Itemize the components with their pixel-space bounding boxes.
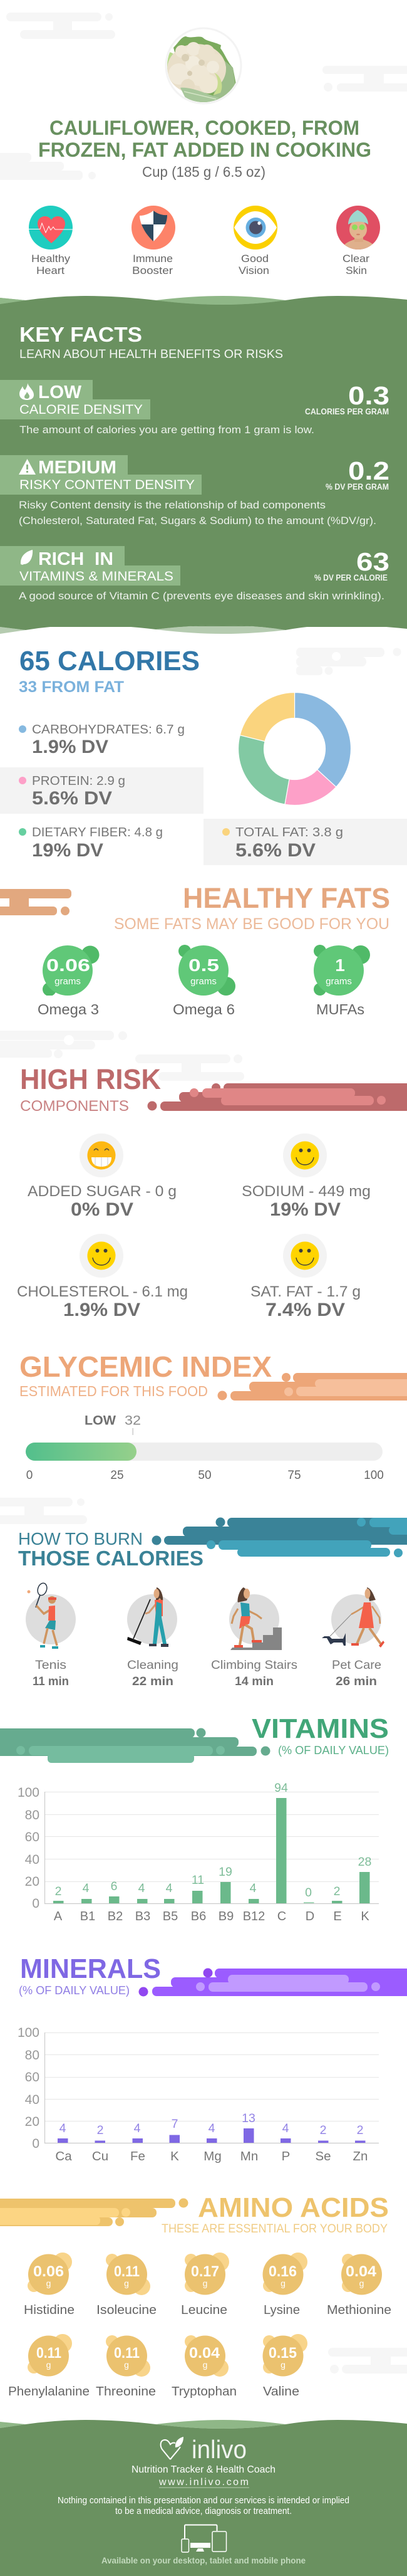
bar chart: vitamins: 4 [138,1881,145,1895]
risk: added sugar: 0% DV [71,1199,133,1220]
tagline and website: www.inlivo.com [158,2477,249,2488]
bar chart: vitamins: 20 [25,1874,39,1889]
tagline and website: Nutrition Tracker & Health Coach [131,2464,276,2475]
glycemic index gauge [26,1413,384,1482]
wave: bottom of key facts [0,625,407,634]
amino acid: tryptophan: g [203,2360,207,2370]
risk: added sugar [28,1133,177,1220]
vitamins heading [252,1713,389,1757]
amino acid: isoleucine [96,2254,157,2317]
background clouds: high risk [0,1031,244,1081]
bar chart: vitamins: 28 [358,1855,371,1869]
benefit: immune booster: Immune [133,253,173,265]
disclaimer [58,2496,349,2516]
activity: tennis: Tenis [35,1658,66,1672]
bar chart: vitamins: 2 [55,1885,61,1898]
amino acid: phenylalanine [8,2334,90,2399]
bar chart: minerals: Ca [55,2149,72,2163]
title: CAULIFLOWER, COOKED, FROM [49,117,359,139]
fact: low calorie density [0,380,389,436]
background cloud: calories [296,648,401,675]
decoration: burn swoosh [152,1517,407,1557]
bar chart: vitamins: 4 [83,1881,90,1895]
minerals heading [19,1953,161,1997]
how to burn heading [18,1529,204,1570]
fat: omega 6: Omega 6 [173,1001,235,1017]
bar chart: vitamins: K [361,1910,369,1923]
serving size: Cup (185 g / 6.5 oz) [142,164,265,180]
logo: inlivo [161,2435,247,2464]
benefit: immune booster [131,206,175,276]
calories heading [19,646,200,696]
bar chart: vitamins: C [277,1910,286,1923]
bar chart: vitamins: 0 [32,1896,39,1911]
calories heading: 33 FROM FAT [19,678,124,696]
risk: added sugar: ADDED SUGAR - 0 g [28,1183,177,1200]
amino acids heading [162,2192,389,2236]
bar chart: minerals: 2 [320,2123,326,2137]
how to burn heading: HOW TO BURN [18,1529,143,1548]
amino acid: threonine: 0.11 [114,2345,140,2362]
vitamins heading: VITAMINS [252,1713,389,1744]
amino acid: methionine: Methionine [327,2303,391,2317]
bar chart: vitamins: E [333,1910,342,1923]
legend: protein: 5.6% DV [32,788,112,809]
amino acid: lysine: g [281,2278,286,2288]
amino acid: histidine: 0.06 [33,2263,64,2280]
fact: low calorie density: 0.3 [348,381,389,410]
glycemic index gauge: 32 [125,1413,141,1428]
bar chart: minerals: K [170,2149,179,2163]
amino acid: phenylalanine: 0.11 [36,2345,61,2362]
legend: protein: PROTEIN: 2.9 g [32,774,125,788]
activity: pet care: 26 min [336,1674,377,1688]
glycemic index gauge: 50 [198,1469,212,1482]
bar chart: vitamins: B9 [219,1910,234,1923]
legend: total fat: 5.6% DV [235,840,316,861]
fact: medium risky content density: (Cholesterol, Saturated Fat, Sugars & Sodium) to the amount (%DV/gr). [19,515,376,527]
amino acid: histidine: g [46,2278,51,2288]
decoration: high risk swoosh [148,1083,407,1111]
benefit: healthy heart: Healthy [31,253,71,265]
fact: rich in vitamins and minerals [0,546,389,602]
bar chart: vitamins: 19 [219,1865,232,1879]
fact: low calorie density: CALORIE DENSITY [19,402,143,417]
bar chart: vitamins: B12 [243,1910,265,1923]
bar chart: minerals: 7 [172,2117,178,2131]
bar chart: minerals: 4 [209,2121,215,2135]
amino acid: isoleucine: g [124,2278,129,2288]
bar chart: vitamins: 4 [250,1881,257,1895]
benefit: immune booster: Booster [132,265,173,276]
background cloud: top left [6,13,115,39]
calories heading: 65 CALORIES [19,646,200,676]
bar chart: minerals: 20 [25,2115,39,2129]
fact: rich in vitamins and minerals: VITAMINS & MINERALS [19,569,173,584]
activity: climbing stairs [211,1587,297,1688]
amino acid: leucine: g [203,2278,207,2288]
legend: carbohydrates: 1.9% DV [32,737,108,757]
bar chart: vitamins: 4 [166,1881,173,1895]
risk: sodium: SODIUM - 449 mg [242,1183,371,1200]
vitamins heading: (% OF DAILY VALUE) [278,1743,389,1757]
amino acid: leucine: 0.17 [191,2263,219,2280]
disclaimer: to be a medical advice, diagnosis or treatment. [115,2506,292,2516]
bar chart: minerals: 4 [282,2121,289,2135]
amino acid: leucine [181,2253,229,2317]
risk: saturated fat: SAT. FAT - 1.7 g [250,1283,361,1300]
bar chart: vitamins: D [306,1910,314,1923]
amino acid: histidine [24,2253,75,2317]
disclaimer: Nothing contained in this presentation and our services is intended or implied [58,2496,349,2506]
amino acid: lysine: 0.16 [269,2263,297,2280]
decoration: minerals swoosh [139,1969,407,1996]
decoration: glycemic swoosh [218,1373,407,1401]
fact: low calorie density: The amount of calories you are getting from 1 gram is low. [19,424,314,436]
amino acid: valine: Valine [263,2385,299,2399]
activity: cleaning: 22 min [132,1674,173,1688]
amino acid: methionine: 0.04 [346,2263,377,2280]
bar chart: vitamins: 40 [25,1853,39,1867]
activity: climbing stairs: 14 min [235,1674,274,1688]
amino acid: leucine: Leucine [181,2303,227,2317]
panel: footer [0,2420,407,2576]
glycemic index gauge: 100 [364,1469,384,1482]
bar chart: minerals: 4 [59,2121,66,2135]
fact: low calorie density: CALORIES PER GRAM [305,407,389,416]
background cloud: burn [0,1498,87,1524]
bar chart: vitamins: B5 [163,1910,178,1923]
fact: medium risky content density: % DV PER GRAM [326,482,389,492]
bar chart: minerals: 13 [242,2111,255,2125]
bar chart: vitamins: 80 [25,1808,39,1822]
food image: cauliflower [166,28,241,107]
activity: pet care: Pet Care [332,1658,381,1672]
amino acids heading: THESE ARE ESSENTIAL FOR YOUR BODY [162,2222,388,2236]
benefit: clear skin: Clear [343,253,369,265]
benefit: good vision: Good [241,253,269,265]
benefit: healthy heart [29,206,73,276]
legend: dietary fiber: DIETARY FIBER: 4.8 g [32,825,163,839]
fat: mufas [314,945,370,1017]
amino acid: isoleucine: Isoleucine [96,2303,157,2317]
legend: total fat: TOTAL FAT: 3.8 g [235,825,343,839]
fat: mufas: 1 [335,955,345,975]
benefit: healthy heart: Heart [36,265,64,276]
activity: cleaning [127,1587,178,1688]
bar chart: vitamins: 0 [305,1886,312,1900]
bar chart: minerals: 4 [134,2121,141,2135]
donut chart: macronutrients [239,692,351,805]
fact: medium risky content density: 0.2 [348,456,389,485]
bar chart: vitamins: 60 [25,1830,39,1844]
amino acid: tryptophan: Tryptophan [172,2385,237,2399]
glycemic index gauge: 0 [26,1469,33,1482]
fat: omega 3: 0.06 [46,955,90,975]
amino acid: methionine: g [359,2278,364,2288]
key facts heading [19,323,283,361]
fat: omega 3 [38,945,99,1017]
fat: mufas: grams [326,976,352,987]
amino acids heading: AMINO ACIDS [198,2192,389,2223]
healthy fats heading: SOME FATS MAY BE GOOD FOR YOU [114,915,389,933]
title: FROZEN, FAT ADDED IN COOKING [38,139,371,161]
risk: sodium: 19% DV [270,1199,341,1220]
amino acid: isoleucine: 0.11 [114,2263,140,2280]
bar chart: minerals: 100 [18,2026,39,2040]
bar chart: vitamins: 11 [192,1873,204,1887]
healthy fats heading: HEALTHY FATS [183,882,390,914]
bar chart: minerals: Mg [204,2149,222,2163]
healthy fats heading [114,882,390,933]
amino acid: valine: 0.15 [269,2345,297,2362]
decoration: amino acids swoosh [0,2198,188,2226]
background cloud: amino acids [328,2348,407,2374]
fact: rich in vitamins and minerals: A good source of Vitamin C (prevents eye diseases and skin wrinkling). [19,590,384,602]
bar chart: minerals: 40 [25,2093,39,2107]
benefit: clear skin: Skin [346,265,367,276]
fat: mufas: MUFAs [316,1001,364,1017]
panel: key facts [0,296,407,627]
risk: cholesterol: 1.9% DV [63,1300,140,1320]
risk: sodium [242,1133,371,1220]
fat: omega 6 [173,945,235,1017]
legend: dietary fiber [19,825,163,861]
amino acid: methionine [327,2254,391,2317]
bar chart: minerals: 2 [97,2123,103,2137]
activity: cleaning: Cleaning [127,1658,178,1672]
glycemic index heading [19,1350,272,1399]
activity: climbing stairs: Climbing Stairs [211,1658,297,1672]
bar chart: vitamins [18,1781,379,1923]
risk: cholesterol [17,1234,188,1320]
bar chart: vitamins: B6 [191,1910,206,1923]
availability note: Available on your desktop, tablet and mobile phone [101,2555,306,2565]
minerals heading: MINERALS [20,1953,161,1984]
how to burn heading: THOSE CALORIES [18,1547,204,1570]
fact: medium risky content density: RISKY CONTENT DENSITY [19,478,195,492]
background cloud: top right [322,66,407,92]
legend: dietary fiber: 19% DV [32,840,103,861]
fact: rich in vitamins and minerals: 63 [356,547,389,576]
fact: medium risky content density: Risky Content density is the relationship of bad components [19,499,326,511]
activity: tennis [26,1582,76,1688]
amino acid: lysine: Lysine [264,2303,300,2317]
legend: protein [0,767,204,814]
activity: pet care [322,1587,384,1688]
bar chart: minerals: Mn [240,2149,258,2163]
activity: tennis: 11 min [33,1674,69,1688]
bar chart: minerals: P [282,2149,290,2163]
glycemic index gauge: 75 [287,1469,301,1482]
bar chart: minerals: 60 [25,2070,39,2084]
decoration: vitamins swoosh [0,1728,270,1763]
glycemic index heading: ESTIMATED FOR THIS FOOD [19,1383,208,1399]
key facts heading: KEY FACTS [19,323,142,346]
fat: omega 6: grams [190,976,217,987]
fat: omega 3: grams [54,976,81,987]
legend: carbohydrates: CARBOHYDRATES: 6.7 g [32,722,185,737]
amino acid: histidine: Histidine [24,2303,75,2317]
amino acid: threonine: Threonine [96,2385,156,2399]
bar chart: vitamins: 94 [274,1781,288,1795]
benefit: good vision: Vision [239,265,269,276]
bar chart: minerals: 80 [25,2048,39,2063]
logo: inlivo: inlivo [192,2435,247,2464]
title [38,117,371,161]
key facts heading: LEARN ABOUT HEALTH BENEFITS OR RISKS [19,347,283,361]
bar chart: vitamins: 6 [111,1879,117,1893]
bar chart: minerals: Zn [353,2149,368,2163]
icon: devices [182,2525,227,2552]
minerals heading: (% OF DAILY VALUE) [19,1984,130,1997]
risk: saturated fat: 7.4% DV [265,1300,345,1320]
glycemic index gauge: LOW [85,1413,116,1428]
amino acid: valine [263,2334,307,2399]
fact: low calorie density: LOW [38,382,82,402]
bar chart: minerals: 0 [32,2137,39,2151]
bar chart: vitamins: A [54,1910,63,1923]
amino acid: valine: g [281,2360,286,2370]
high risk heading: HIGH RISK [20,1063,161,1095]
fact: medium risky content density [0,455,389,527]
amino acid: threonine: g [124,2360,129,2370]
decoration: healthy fats swoosh [0,889,71,915]
bar chart: minerals: Cu [92,2149,108,2163]
bar chart: vitamins: 2 [334,1885,340,1898]
amino acid: tryptophan [172,2335,237,2399]
bar chart: minerals: Fe [130,2149,145,2163]
high risk heading [20,1063,161,1115]
fact: rich in vitamins and minerals: % DV PER CALORIE [314,573,388,582]
bar chart: vitamins: B3 [135,1910,150,1923]
bar chart: minerals: 2 [357,2123,363,2137]
glycemic index heading: GLYCEMIC INDEX [19,1350,272,1383]
fat: omega 3: Omega 3 [38,1001,99,1017]
benefit: good vision [234,206,277,276]
risk: saturated fat [250,1234,361,1320]
fact: rich in vitamins and minerals: RICH IN [38,549,113,569]
background cloud: left of title [0,153,96,180]
bar chart: minerals [18,2026,379,2163]
bar chart: vitamins: B1 [80,1910,95,1923]
amino acid: threonine [96,2335,156,2399]
tagline and website [131,2464,276,2488]
bar chart: minerals: Se [315,2149,331,2163]
amino acid: phenylalanine: g [46,2360,51,2370]
fat: omega 6: 0.5 [188,955,219,975]
amino acid: tryptophan: 0.04 [189,2345,220,2362]
amino acid: phenylalanine: Phenylalanine [8,2385,90,2399]
benefit: clear skin [336,206,380,276]
high risk heading: COMPONENTS [20,1098,129,1115]
legend: total fat [204,819,407,865]
glycemic index gauge: 25 [110,1469,124,1482]
fact: medium risky content density: MEDIUM [38,458,116,478]
legend: carbohydrates [19,722,185,757]
risk: cholesterol: CHOLESTEROL - 6.1 mg [17,1283,188,1300]
bar chart: vitamins: 100 [18,1785,39,1800]
amino acid: lysine [263,2253,307,2317]
bar chart: vitamins: B2 [108,1910,123,1923]
